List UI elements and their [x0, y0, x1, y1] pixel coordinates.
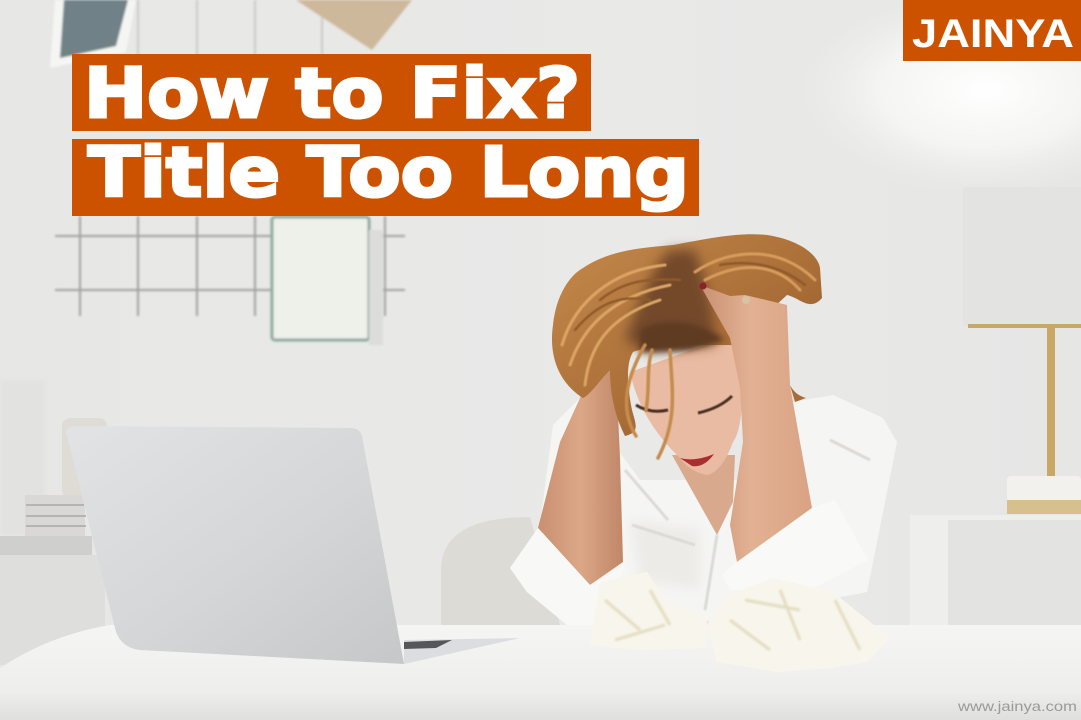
neck: [672, 455, 735, 535]
laptop: [66, 426, 520, 664]
ring: [742, 296, 750, 304]
brand badge: JAINYA: JAINYA: [912, 12, 1074, 56]
rolled sleeve right: [722, 500, 868, 590]
website url: www.jainya.com: [957, 698, 1077, 714]
lamp: [963, 187, 1081, 514]
desk: [0, 625, 1081, 720]
chair: [441, 517, 560, 625]
title line 2 banner: Title Too Long: [88, 133, 689, 213]
side cabinet: [910, 515, 1081, 625]
left arm: [538, 358, 623, 585]
woman: [510, 234, 897, 627]
rolled sleeve left: [510, 528, 625, 627]
hair: [552, 234, 822, 458]
wall decoration: wire grid with notes: [50, 0, 412, 345]
fingernail: [700, 282, 706, 290]
brand badge: JAINYA: [903, 0, 1081, 61]
crumpled tissues: [590, 572, 890, 672]
left shelf with books: [0, 380, 107, 665]
face: [630, 335, 742, 475]
right arm and hand: [700, 285, 812, 562]
title line 1 banner: How to Fix?: [84, 54, 580, 134]
shirt: [510, 395, 897, 627]
